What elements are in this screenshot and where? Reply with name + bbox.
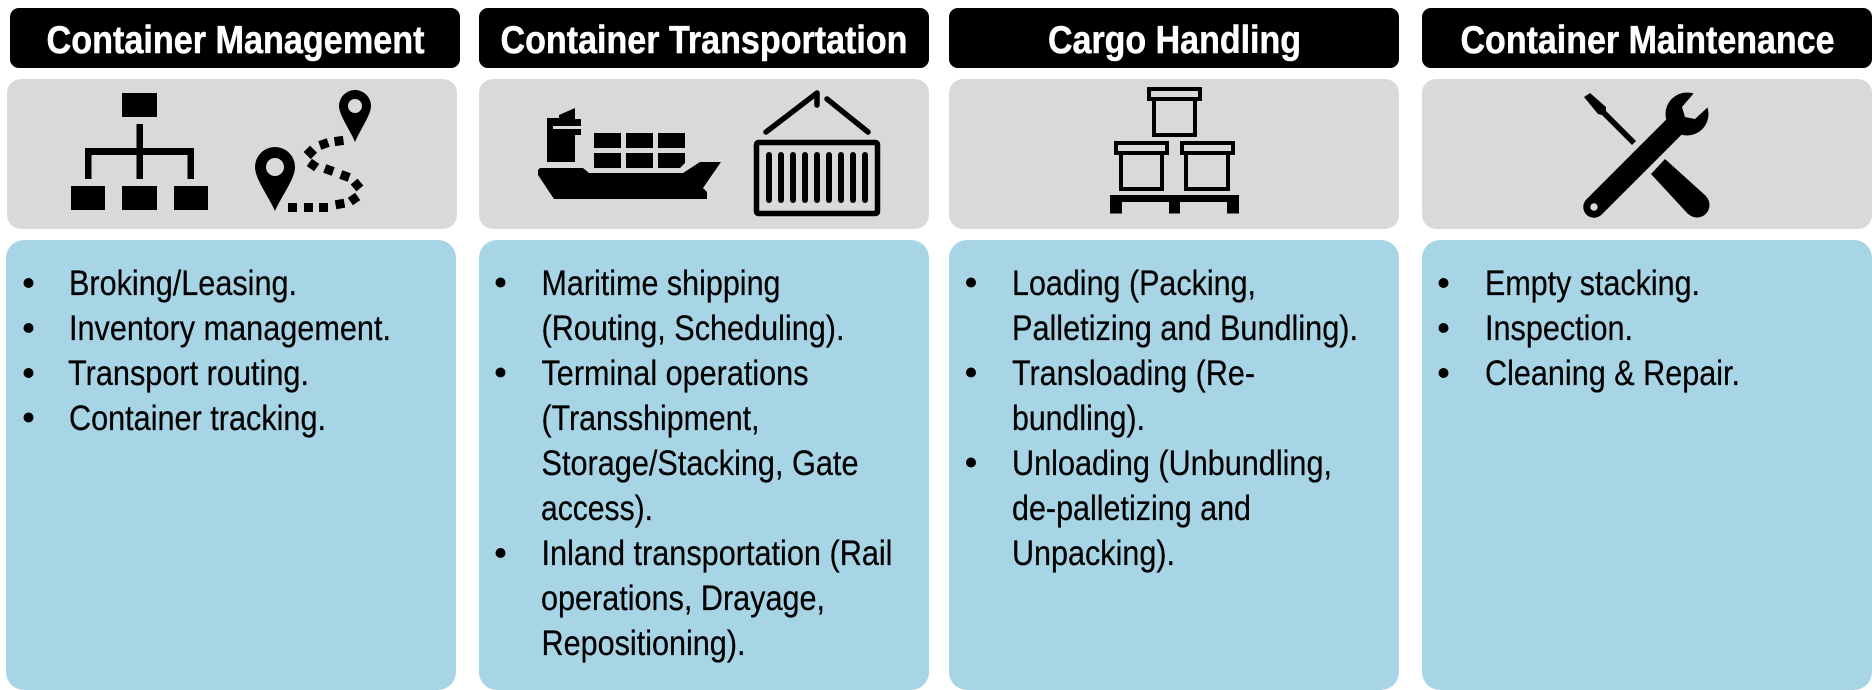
icon: hoisted container <box>756 93 878 214</box>
text panel: container transportation tasks: operations, Drayage, <box>541 579 825 618</box>
text panel: container transportation tasks: (Routing, Scheduling). <box>542 309 844 348</box>
text panel: cargo handling tasks: Unpacking). <box>1012 534 1175 573</box>
text panel: cargo handling tasks: Unloading (Unbundling, <box>1012 444 1332 483</box>
text panel: container transportation tasks: access). <box>541 489 653 528</box>
text panel: cargo handling tasks: bundling). <box>1012 399 1145 438</box>
text panel: container transportation tasks <box>479 240 929 690</box>
text panel: container management tasks: Broking/Leasing. <box>69 264 297 303</box>
icon: organisation chart <box>71 93 208 210</box>
heading: container management <box>10 8 460 68</box>
text panel: container transportation tasks: Maritime shipping <box>542 264 780 303</box>
text panel: container transportation tasks: (Transshipment, <box>542 399 760 438</box>
text panel: container transportation tasks: Storage/Stacking, Gate <box>542 444 858 483</box>
text panel: cargo handling tasks <box>949 240 1399 690</box>
icon panel: organisation chart and route <box>7 79 457 229</box>
icon panel: tools <box>1422 79 1872 229</box>
panel: container management <box>6 8 460 690</box>
text panel: cargo handling tasks: Transloading (Re- <box>1012 354 1255 393</box>
icon: stacked boxes on a pallet <box>1110 89 1239 214</box>
heading: container management: Container Management <box>46 19 425 62</box>
text panel: container management tasks <box>6 240 456 690</box>
text panel: container transportation tasks: Terminal operations <box>542 354 808 393</box>
text panel: container transportation tasks: Inland transportation (Rail <box>542 534 892 573</box>
text panel: cargo handling tasks: de-palletizing and <box>1012 489 1251 528</box>
heading: container transportation: Container Transportation <box>500 19 908 62</box>
icon: container ship <box>538 108 721 199</box>
panel: container maintenance <box>1422 8 1872 690</box>
text panel: container transportation tasks: Repositioning). <box>542 624 746 663</box>
icon: route with map pins <box>255 90 371 212</box>
panel: cargo handling <box>949 8 1399 690</box>
panel: container transportation <box>479 8 929 690</box>
text panel: container maintenance tasks: Empty stacking. <box>1485 264 1700 303</box>
icon panel: boxes on pallet <box>949 79 1399 229</box>
icon: screwdriver and wrench <box>1584 86 1714 218</box>
text panel: container maintenance tasks: Cleaning & Repair. <box>1485 354 1740 393</box>
icon panel: ship and container <box>479 79 929 229</box>
heading: cargo handling <box>949 8 1399 68</box>
text panel: cargo handling tasks: Loading (Packing, <box>1012 264 1256 303</box>
heading: cargo handling: Cargo Handling <box>1048 19 1301 62</box>
text panel: container maintenance tasks <box>1422 240 1872 690</box>
heading: container transportation <box>479 8 929 68</box>
heading: container maintenance <box>1422 8 1872 68</box>
text panel: container maintenance tasks: Inspection. <box>1485 309 1633 348</box>
text panel: container management tasks: Inventory management. <box>69 309 391 348</box>
text panel: container management tasks: Transport routing. <box>68 354 309 393</box>
text panel: container management tasks: Container tracking. <box>69 399 326 438</box>
text panel: cargo handling tasks: Palletizing and Bundling). <box>1012 309 1358 348</box>
